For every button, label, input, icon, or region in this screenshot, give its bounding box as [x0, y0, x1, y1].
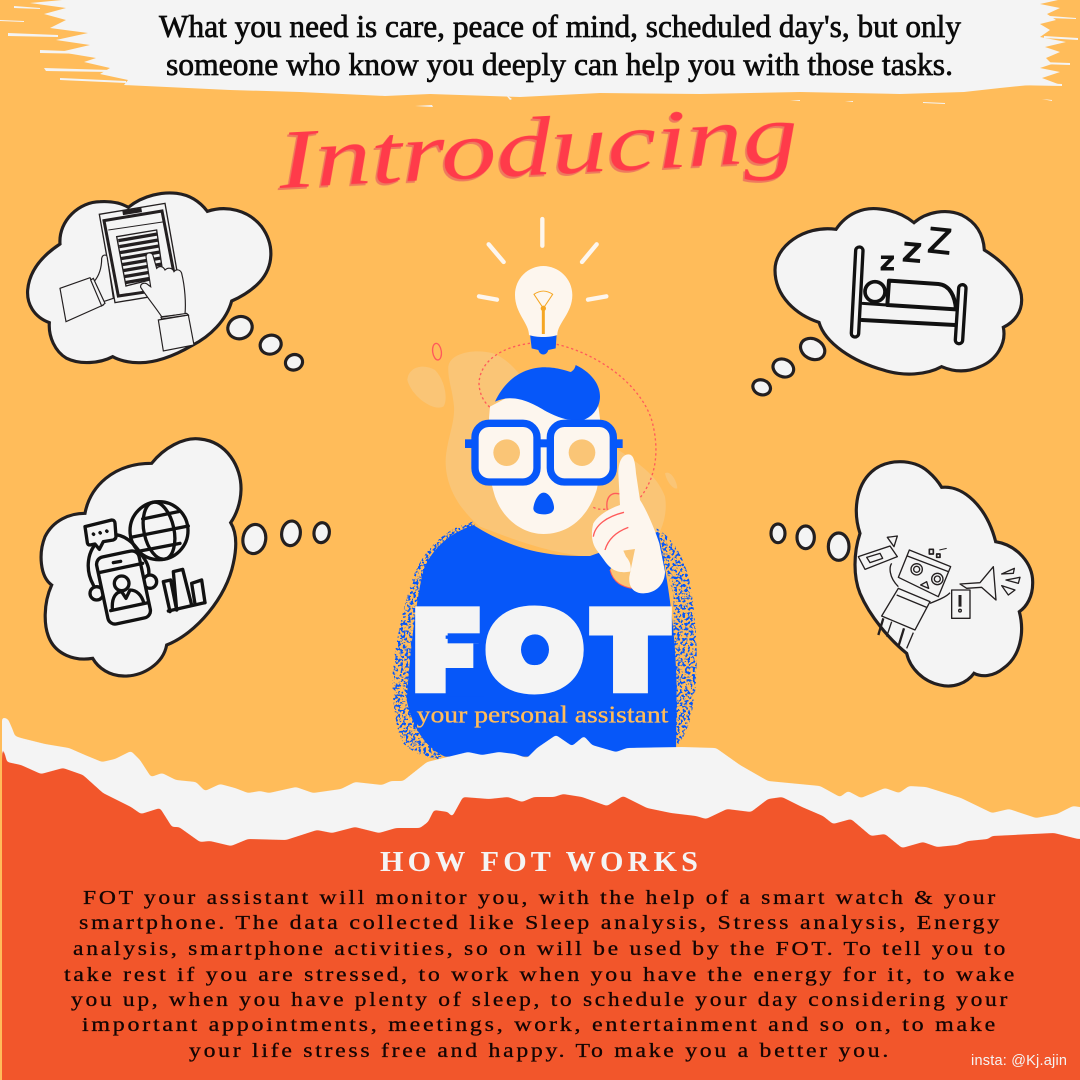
F and O counters [448, 633, 549, 697]
pointing hand [592, 454, 665, 593]
thought bubbles [771, 524, 849, 560]
FOT wordmark: F [417, 594, 475, 706]
body text [64, 887, 1017, 1062]
heading: how FOT works: HOW FOT WORKS [380, 846, 702, 878]
cloud outline [775, 209, 1022, 374]
cloud outline [41, 439, 241, 676]
banner text: What you need is care, peace of mind, scheduled day's, but only [159, 8, 961, 44]
face [488, 377, 601, 534]
FOT wordmark [417, 594, 663, 706]
icon: person on phone, globe and chart [85, 499, 205, 625]
credit: insta: @Kj.ajin [971, 1053, 1067, 1069]
cloud outline [855, 462, 1033, 686]
icon: person in bed [855, 221, 962, 340]
cloud outline [28, 193, 271, 363]
body text: important appointments, meetings, work, entertainment and so on, to make [82, 1014, 998, 1036]
icon: person in bed: Z [901, 237, 923, 270]
small red loop [432, 343, 442, 361]
torn paper white layer [2, 717, 1080, 870]
tagline: your personal assistant [417, 702, 668, 729]
FOT wordmark: O [491, 594, 578, 706]
thought cloud: sleep [751, 209, 1022, 397]
icon: person in bed: z [879, 246, 895, 277]
title: Introducing: Introducing [275, 87, 800, 207]
glasses [465, 423, 623, 482]
thought bubbles [225, 313, 305, 372]
body text: take rest if you are stressed, to work when you have the energy for it, to wake [64, 964, 1017, 986]
light bulb [479, 219, 606, 354]
shirt with speckled edge [392, 522, 697, 760]
body text: analysis, smartphone activities, so on will be used by the FOT. To tell you to [73, 938, 1008, 960]
brush stroke shape [0, 0, 1078, 107]
icon: robot with camera and megaphone [858, 536, 1020, 648]
thought bubbles [751, 334, 829, 397]
body text: you up, when you have plenty of sleep, to schedule your day considering your [71, 989, 1010, 1011]
character: FOT assistant [392, 219, 697, 760]
FOT wordmark: T [598, 594, 663, 706]
banner text [159, 8, 961, 82]
thought bubbles [241, 520, 331, 555]
dotted circle path [479, 343, 656, 509]
top banner [0, 0, 1078, 107]
thought cloud: tablet [28, 193, 305, 372]
thought cloud: phone and globe [41, 439, 331, 676]
thought cloud: robot [771, 462, 1033, 686]
orange footer panel [2, 743, 1080, 1080]
icon: person in bed: Z [926, 221, 954, 263]
body text: smartphone. The data collected like Sleep analysis, Stress analysis, Energy [79, 912, 1002, 934]
mouth [533, 493, 554, 514]
hair [495, 365, 600, 420]
banner text: someone who know you deeply can help you with those tasks. [166, 46, 953, 82]
body text: FOT your assistant will monitor you, with the help of a smart watch & your [83, 887, 998, 909]
body text: your life stress free and happy. To make you a better you. [189, 1040, 891, 1062]
icon: tablet with hands [60, 203, 194, 351]
light blobs [407, 351, 677, 557]
